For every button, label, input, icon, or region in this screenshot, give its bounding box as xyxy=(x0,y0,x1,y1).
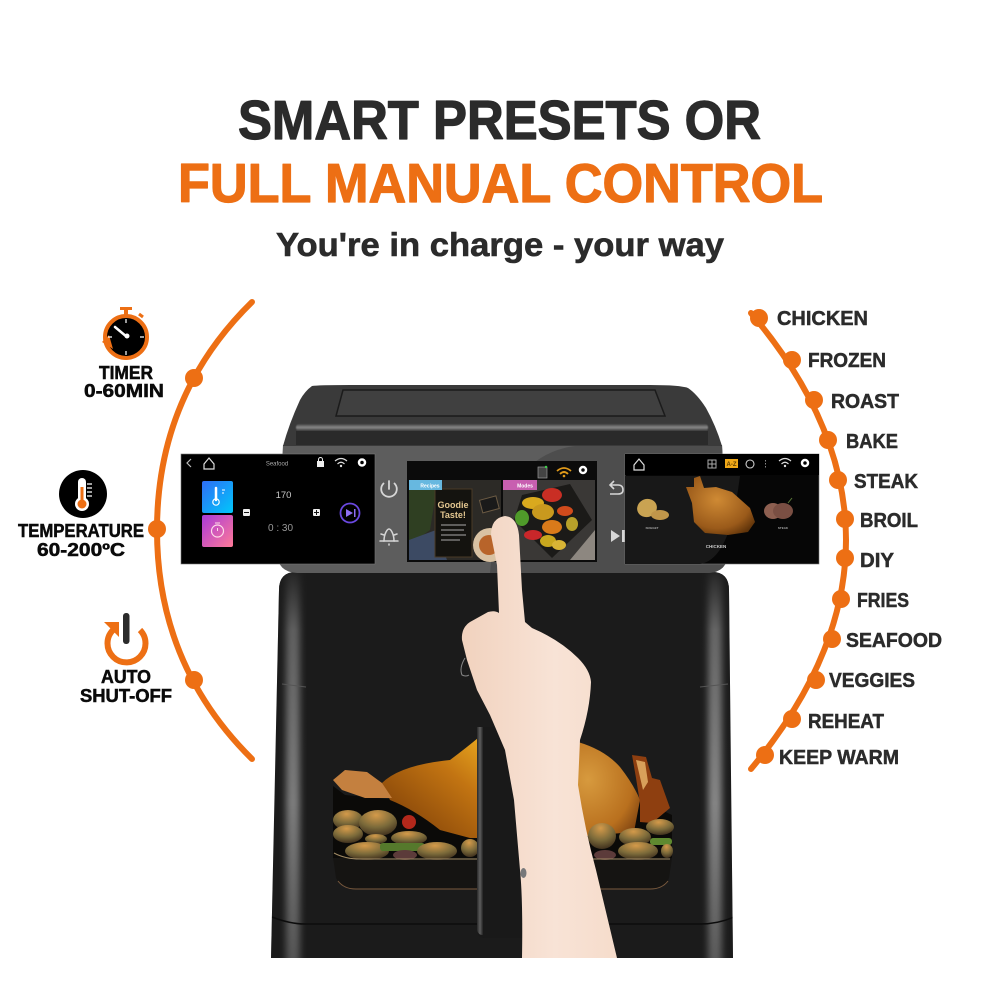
lid xyxy=(283,385,722,446)
screen top bar xyxy=(634,458,808,470)
label: TEMPERATURE xyxy=(18,521,144,541)
temperature value: 170 xyxy=(276,490,291,501)
icon: stopwatch xyxy=(102,307,147,358)
preset labels: BAKE xyxy=(846,430,898,453)
preset labels: FRIES xyxy=(857,589,909,612)
screen top bar: A-Z xyxy=(726,462,737,468)
start button xyxy=(340,504,360,522)
preset labels: SEAFOOD xyxy=(846,629,942,652)
marker dot xyxy=(148,520,166,538)
brand mark xyxy=(461,658,469,676)
left settings screen xyxy=(181,454,375,564)
preset labels: BROIL xyxy=(860,509,918,532)
label xyxy=(80,667,172,706)
marker dot xyxy=(185,369,203,387)
time value: 0 : 30 xyxy=(268,523,293,534)
air fryer xyxy=(268,385,738,970)
center touchscreen xyxy=(407,461,597,562)
feature: temperature xyxy=(18,470,166,560)
recipes photo: Taste! xyxy=(440,510,466,520)
left arc xyxy=(157,302,252,759)
door handle xyxy=(477,727,522,938)
wing xyxy=(632,755,670,823)
preset markers xyxy=(750,309,854,764)
label xyxy=(18,521,144,560)
hand pressing screen xyxy=(462,516,617,958)
chicken right side xyxy=(560,742,640,836)
icon: play pause button xyxy=(611,530,625,542)
preset list xyxy=(750,307,942,769)
feature: auto shut-off xyxy=(80,613,203,706)
preset labels: VEGGIES xyxy=(829,669,915,692)
modes photo: Modes xyxy=(517,484,533,490)
right arc xyxy=(751,313,846,769)
drumstick xyxy=(333,770,392,798)
feature: timer xyxy=(84,307,203,401)
title: SMART PRESETS OR xyxy=(238,89,761,151)
timer tile xyxy=(202,515,233,547)
chicken left side xyxy=(382,738,478,838)
temperature tile xyxy=(202,481,233,513)
icon: power button xyxy=(381,481,397,497)
minus button xyxy=(243,509,250,516)
label: 0-60MIN xyxy=(84,381,164,401)
label xyxy=(84,363,164,401)
preset labels: KEEP WARM xyxy=(779,746,899,769)
recipes photo: Goodie xyxy=(438,500,468,510)
icon: light button xyxy=(380,529,398,545)
preset labels: CHICKEN xyxy=(777,307,868,330)
roast chicken: CHICKEN xyxy=(706,544,726,549)
nuggets: NUGGET xyxy=(646,526,659,530)
label: AUTO xyxy=(101,667,151,687)
potatoes xyxy=(333,810,674,860)
icon: back button xyxy=(610,481,623,494)
icon: power with arrow xyxy=(104,613,146,662)
preset labels: DIY xyxy=(860,549,894,572)
screen top bar: Seafood xyxy=(266,462,288,468)
label: SHUT-OFF xyxy=(80,686,172,706)
recipes photo xyxy=(409,480,507,562)
label: 60-200ºC xyxy=(37,540,125,560)
subtitle: You're in charge - your way xyxy=(276,226,725,263)
fryer body xyxy=(268,570,738,970)
nuggets xyxy=(635,496,669,530)
plus button xyxy=(313,509,320,516)
marker dot xyxy=(185,671,203,689)
window with roast chicken xyxy=(333,738,674,889)
steak: STEAK xyxy=(778,526,789,530)
label: TIMER xyxy=(99,363,153,383)
title: FULL MANUAL CONTROL xyxy=(178,152,823,214)
wrist tattoo xyxy=(520,868,526,878)
steak xyxy=(764,498,793,530)
icon: thermometer xyxy=(59,470,107,518)
preset labels: REHEAT xyxy=(808,710,884,733)
right presets screen xyxy=(625,454,819,564)
preset labels xyxy=(777,307,942,769)
roast chicken xyxy=(686,476,755,549)
screen top bar xyxy=(187,458,365,469)
title xyxy=(178,89,823,214)
preset labels: ROAST xyxy=(831,390,899,413)
status icons xyxy=(538,466,586,478)
recipes photo: Recipes xyxy=(420,484,440,490)
modes photo xyxy=(503,480,595,560)
preset labels: FROZEN xyxy=(808,349,886,372)
preset labels: STEAK xyxy=(854,470,918,493)
control panel xyxy=(277,445,728,573)
